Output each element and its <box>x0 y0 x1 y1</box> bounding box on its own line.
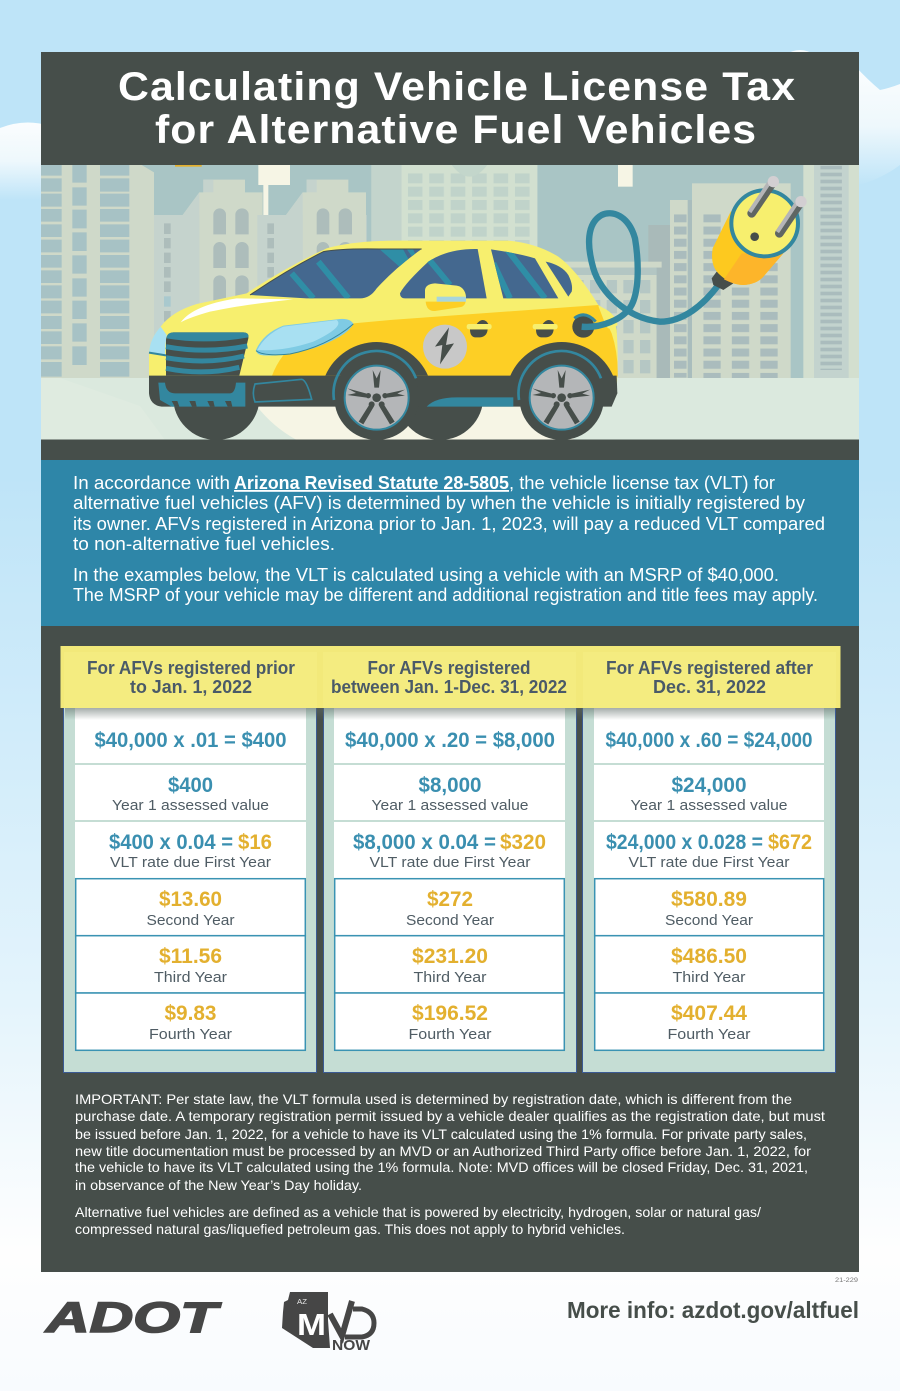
fourth year: $196.52 <box>412 1002 488 1025</box>
cable and plug <box>582 176 807 327</box>
header: column 3: Dec. 31, 2022 <box>653 677 766 697</box>
MVD Now logo <box>282 1292 374 1354</box>
ground <box>41 378 859 440</box>
fourth year <box>149 1002 232 1043</box>
car body <box>149 241 618 407</box>
third year: $486.50 <box>671 945 747 968</box>
charging cable <box>582 213 718 327</box>
assessed value: $8,000 <box>418 774 482 797</box>
intro paragraph 1: Arizona Revised Statute 28-5805 <box>234 473 509 493</box>
second year <box>146 888 235 929</box>
wheels <box>334 351 604 440</box>
formula: $40,000 x .20 = $8,000 <box>345 729 555 752</box>
grille <box>166 332 248 376</box>
third year <box>154 945 227 986</box>
skyline: right buildings <box>560 165 859 378</box>
definition note: Alternative fuel vehicles are defined as a vehicle that is powered by electricity, hydrogen, solar or natural gas/ <box>75 1204 761 1220</box>
more info link: More info: azdot.gov/altfuel <box>567 1297 859 1323</box>
intro panel <box>41 460 859 626</box>
important note: IMPORTANT: Per state law, the VLT formula used is determined by registration date, which is different from the <box>75 1091 792 1107</box>
door handles <box>467 320 558 337</box>
formula: $40,000 x .60 = $24,000 <box>606 729 812 752</box>
assessed value: Year 1 assessed value <box>630 797 788 814</box>
third year: $11.56 <box>159 945 222 968</box>
column 3: registered after Dec. 31, 2022 <box>582 700 836 1072</box>
assessed value: $400 <box>168 774 213 797</box>
intro paragraph 2: In the examples below, the VLT is calculated using a vehicle with an MSRP of $40,000. <box>73 565 779 585</box>
MVD Now logo: AZ <box>297 1299 308 1306</box>
third year: $231.20 <box>412 945 488 968</box>
important note: new title documentation must be processed by an MVD or an Authorized Third Party office before Jan. 1, 2022, for <box>75 1143 811 1159</box>
header: column 2 <box>331 658 567 697</box>
first year VLT: $8,000 x 0.04 = <box>353 831 496 854</box>
first year VLT: VLT rate due First Year <box>628 854 790 871</box>
first year VLT: $16 <box>238 831 272 854</box>
illustration: electric car in city <box>40 165 859 440</box>
first year VLT: $320 <box>500 831 546 854</box>
second year: $580.89 <box>671 888 747 911</box>
assessed value: Year 1 assessed value <box>112 797 269 814</box>
MVD Now logo: NOW <box>332 1337 371 1354</box>
skyline: middle building <box>371 165 538 247</box>
bumper <box>158 379 513 407</box>
third year <box>412 945 488 986</box>
header: column 3: For AFVs registered after <box>606 658 813 678</box>
third year <box>671 945 747 986</box>
header: column 3 <box>606 658 813 697</box>
important note: the vehicle to have its VLT calculated using the 1% formula. Note: MVD offices will be closed Friday, Dec. 31, 2021, <box>75 1159 808 1175</box>
intro paragraph 2 <box>73 565 818 605</box>
lightning badge <box>423 325 467 369</box>
intro paragraph 1: alternative fuel vehicles (AFV) is determined by when the vehicle is initially registered by <box>73 493 805 513</box>
fourth year <box>408 1002 492 1043</box>
far-side tires <box>174 406 482 440</box>
first year VLT: $24,000 x 0.028 = <box>606 831 763 854</box>
important note: purchase date. A temporary registration permit issued by a vehicle dealer qualifies as the registration date, but must <box>75 1108 825 1124</box>
headlight <box>256 319 353 356</box>
fourth year: Fourth Year <box>149 1026 232 1043</box>
first year VLT: VLT rate due First Year <box>110 854 271 871</box>
first year VLT <box>353 831 546 871</box>
header: column 2: between Jan. 1-Dec. 31, 2022 <box>331 677 567 697</box>
fourth year: $407.44 <box>671 1002 747 1025</box>
definition note: compressed natural gas/liquefied petroleum gas. This does not apply to hybrid vehicles. <box>75 1221 625 1237</box>
fourth year <box>668 1002 750 1043</box>
header: column 1: to Jan. 1, 2022 <box>130 677 252 697</box>
fourth year: Fourth Year <box>408 1026 492 1043</box>
third year: Third Year <box>414 969 486 986</box>
car <box>149 241 618 440</box>
second year: Second Year <box>665 912 753 929</box>
yellow column header band <box>60 646 840 720</box>
first year VLT <box>109 831 272 871</box>
first year VLT: $672 <box>768 831 812 854</box>
important note <box>75 1091 825 1193</box>
intro paragraph 1: its owner. AFVs registered in Arizona prior to Jan. 1, 2023, will pay a reduced VLT compared <box>73 514 825 534</box>
title line 2: for Alternative Fuel Vehicles <box>155 107 756 152</box>
column 1: registered prior to Jan. 1, 2022 <box>64 700 316 1072</box>
header: column 2: For AFVs registered <box>368 658 530 678</box>
second year: $272 <box>427 888 473 911</box>
second year: $13.60 <box>159 888 222 911</box>
assessed value <box>112 774 269 814</box>
car windows <box>250 247 572 298</box>
fourth year: $9.83 <box>164 1002 216 1025</box>
first year VLT: $400 x 0.04 = <box>109 831 233 854</box>
important note: in observance of the New Year’s Day holiday. <box>75 1177 362 1193</box>
fourth year: Fourth Year <box>668 1026 750 1043</box>
intro paragraph 1: In accordance with <box>73 473 230 493</box>
second year <box>665 888 753 929</box>
second year: Second Year <box>406 912 494 929</box>
assessed value <box>372 774 528 814</box>
ADOT logo: ADOT <box>45 1294 222 1342</box>
intro paragraph 2: The MSRP of your vehicle may be different and additional registration and title fees may apply. <box>73 585 818 605</box>
formula: $40,000 x .01 = $400 <box>94 729 286 752</box>
dark lower panel <box>41 626 859 1272</box>
side mirror <box>425 283 466 311</box>
document number: 21-229 <box>835 1277 858 1284</box>
title line 1: Calculating Vehicle License Tax <box>118 64 795 109</box>
header: column 1 <box>87 658 295 697</box>
assessed value: $24,000 <box>672 774 746 797</box>
third year: Third Year <box>672 969 746 986</box>
MVD Now logo: M <box>297 1307 326 1342</box>
second year <box>406 888 494 929</box>
intro paragraph 1: , the vehicle license tax (VLT) for <box>509 473 775 493</box>
plug <box>712 176 807 290</box>
intro paragraph 1 <box>73 473 825 554</box>
assessed value <box>630 774 788 814</box>
road strip <box>41 440 859 460</box>
second year: Second Year <box>146 912 235 929</box>
first year VLT <box>606 831 812 871</box>
skyline: left buildings <box>40 165 367 378</box>
title banner <box>41 52 859 165</box>
definition note <box>75 1204 761 1237</box>
first year VLT: VLT rate due First Year <box>370 854 530 871</box>
assessed value: Year 1 assessed value <box>372 797 528 814</box>
charge port <box>572 315 596 338</box>
important note: be issued before Jan. 1, 2022, for a vehicle to have its VLT calculated using the 1% formula. For private party sales, <box>75 1126 807 1142</box>
intro paragraph 1: to non-alternative fuel vehicles. <box>73 534 335 554</box>
third year: Third Year <box>154 969 227 986</box>
column 2: registered between Jan. 1 and Dec. 31, 2022 <box>324 700 576 1072</box>
header: column 1: For AFVs registered prior <box>87 658 295 678</box>
